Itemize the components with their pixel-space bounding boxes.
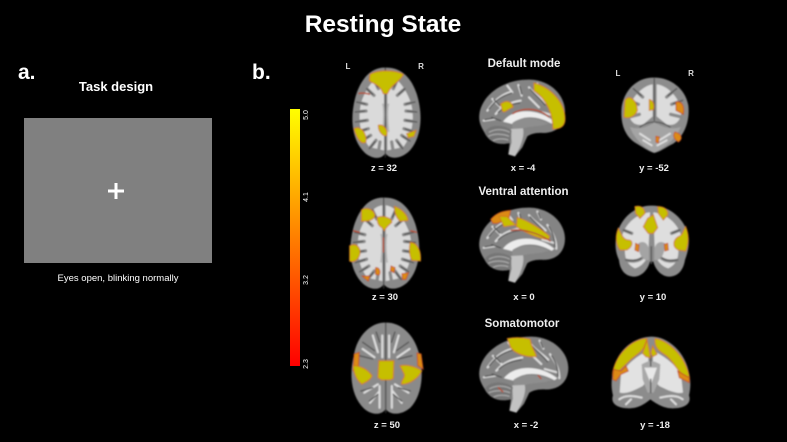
label z=30: z = 30 xyxy=(372,292,398,303)
panel label a: a. xyxy=(18,61,36,84)
label x=-4: x = -4 xyxy=(511,163,536,174)
colour bar legend xyxy=(290,109,310,369)
brain: default mode sagittal x=-4 xyxy=(479,80,565,156)
brain: somatomotor axial z=50 xyxy=(351,323,423,414)
colour bar legend: 2.3 xyxy=(303,359,310,369)
brain: ventral attention coronal y=10 xyxy=(616,206,689,277)
panel label b: b. xyxy=(252,61,271,84)
left/right markers, axial xyxy=(346,62,424,71)
label y=-18: y = -18 xyxy=(640,420,670,431)
network heading: default mode: Default mode xyxy=(488,58,560,70)
left/right markers, axial: R xyxy=(418,62,424,71)
network heading: ventral attention: Ventral attention xyxy=(478,186,569,198)
panel: task design xyxy=(18,61,212,284)
brain: ventral attention sagittal x=0 xyxy=(479,208,565,283)
grey stimulus screen with fixation cross xyxy=(24,118,212,263)
label z=32: z = 32 xyxy=(371,163,397,174)
label y=10: y = 10 xyxy=(640,292,666,303)
label x=-2: x = -2 xyxy=(514,420,538,431)
label x=0: x = 0 xyxy=(513,292,535,303)
left/right markers, axial: L xyxy=(346,62,351,71)
title: Resting State xyxy=(305,11,461,38)
label y=-52: y = -52 xyxy=(639,163,669,174)
left/right markers, coronal: L xyxy=(616,69,621,78)
brain: somatomotor coronal y=-18 xyxy=(612,337,690,408)
left/right markers, coronal: R xyxy=(688,69,694,78)
brain: default mode axial z=32 xyxy=(352,68,421,158)
label z=50: z = 50 xyxy=(374,420,400,431)
colour bar legend: 4.1 xyxy=(303,192,310,202)
colour bar legend: 5.0 xyxy=(303,110,310,120)
brain: somatomotor sagittal x=-2 xyxy=(479,337,568,413)
brain: default mode coronal y=-52 xyxy=(621,78,689,153)
brain: ventral attention axial z=30 xyxy=(350,198,421,289)
left/right markers, coronal xyxy=(616,69,694,78)
network heading: somatomotor: Somatomotor xyxy=(485,318,560,330)
colour bar legend: 3.2 xyxy=(303,275,310,285)
caption: Eyes open, blinking normally xyxy=(58,273,179,284)
heading: task design: Task design xyxy=(79,79,153,94)
